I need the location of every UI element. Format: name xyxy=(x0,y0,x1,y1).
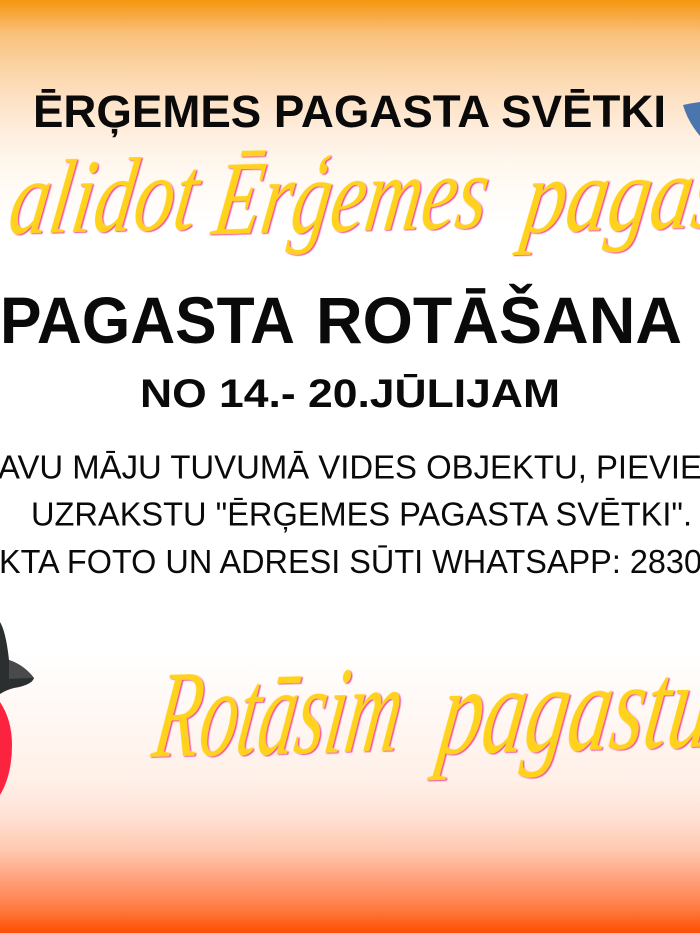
script heading: celebrate the parish: Ērģemes xyxy=(205,134,497,258)
instructions text block: KTA FOTO UN ADRESI SŪTI WHATSAPP: 2830 xyxy=(0,543,700,580)
title: ĒRĢEMES PAGASTA SVĒTKI xyxy=(33,86,666,137)
instructions text block: AVU MĀJU TUVUMĀ VIDES OBJEKTU, PIEVIE xyxy=(0,448,700,486)
icon: hat xyxy=(0,622,34,694)
icon: bird with black hat xyxy=(0,622,34,795)
instructions text block: UZRAKSTU "ĒRĢEMES PAGASTA SVĒTKI". xyxy=(31,496,692,532)
icon: blue shape at top right xyxy=(683,102,700,136)
heading: parish decoration: ROTĀŠANA xyxy=(316,283,682,357)
icon: red body xyxy=(0,702,12,795)
instructions text block xyxy=(0,448,700,580)
heading: parish decoration: PAGASTA xyxy=(0,283,295,357)
script heading: celebrate the parish xyxy=(1,122,700,270)
heading: parish decoration xyxy=(0,283,682,357)
script slogan: let's decorate the parish: Rotāsim xyxy=(145,640,413,785)
date line: NO 14.- 20.JŪLIJAM xyxy=(140,372,560,416)
script heading: celebrate the parish: alidot xyxy=(2,136,209,258)
